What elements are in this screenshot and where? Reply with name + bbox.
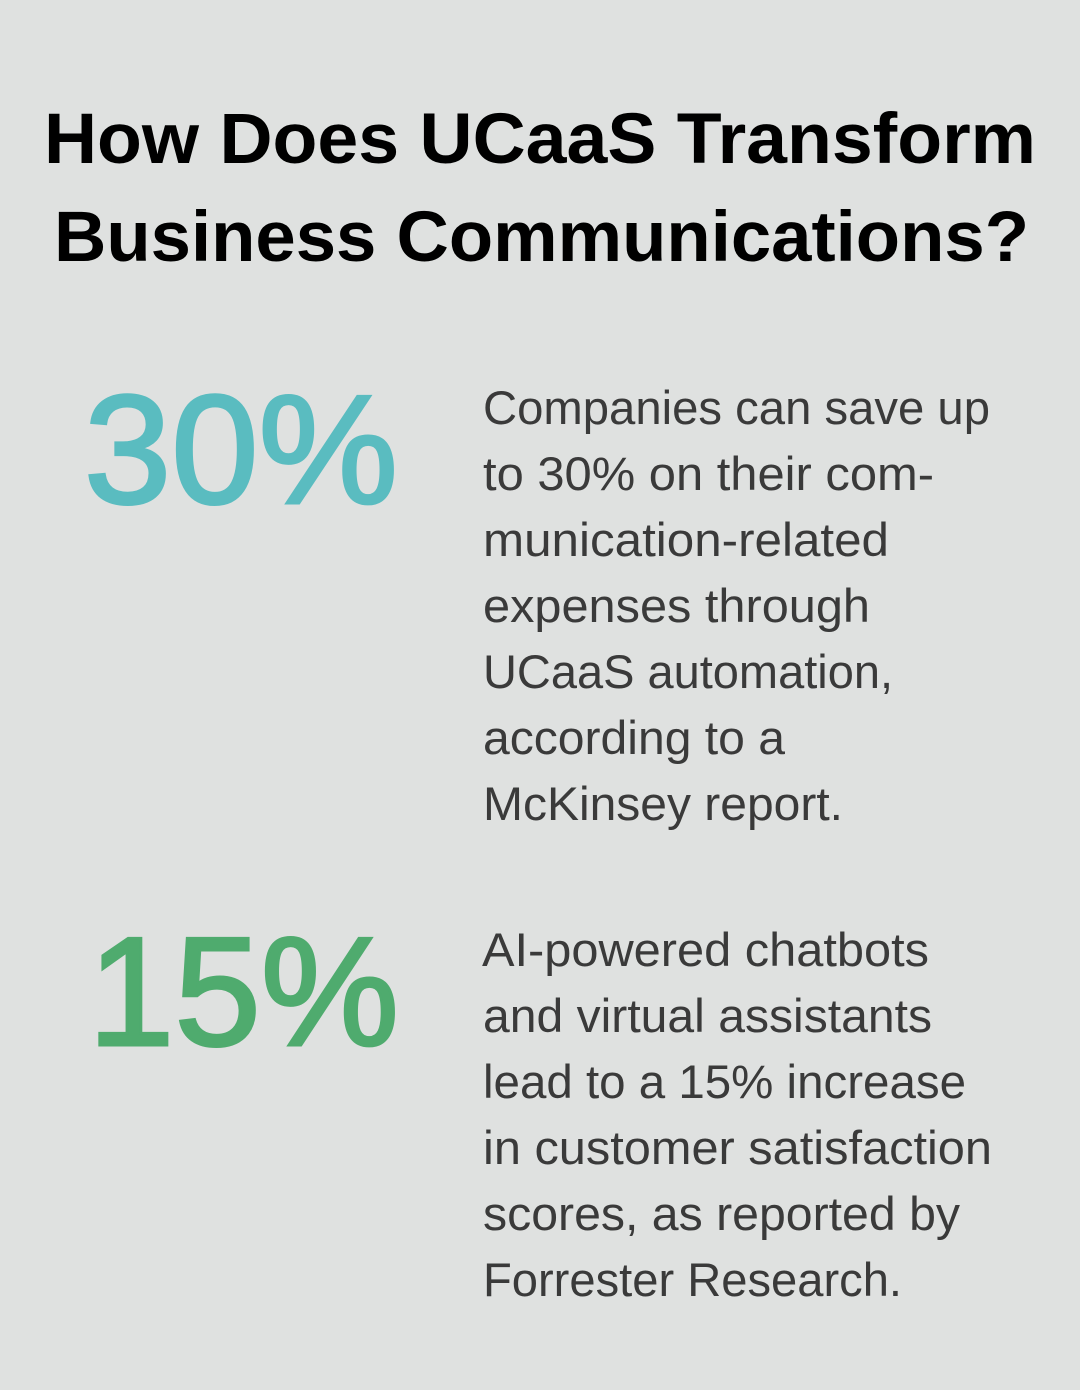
text block: 30% description: expenses through [483,579,870,632]
text block: 15% description: in customer satisfaction [483,1121,992,1174]
text block: 30% description: UCaaS automation, [483,645,893,698]
text block: 15% description: scores, as reported by [483,1187,961,1240]
stat: 15%: 15% [88,905,399,1078]
title [44,100,1036,277]
title: How Does UCaaS Transform [44,100,1036,179]
text block: 30% description: McKinsey report. [483,777,843,830]
text block: 15% description: and virtual assistants [483,989,932,1042]
text block: 15% description: lead to a 15% increase [483,1055,966,1108]
text block: 15% description: Forrester Research. [483,1253,902,1306]
text block: 30% description: according to a [483,711,786,764]
text block: 30% description: to 30% on their com- [483,447,934,500]
text block: 30% description: munication-related [483,513,889,566]
text block: 30% description: Companies can save up [483,381,990,434]
text block: 30% description [483,381,990,830]
text block: 15% description: AI-powered chatbots [482,923,929,976]
text block: 15% description [482,923,992,1306]
stat: 30%: 30% [84,363,398,536]
title: Business Communications? [54,198,1029,277]
